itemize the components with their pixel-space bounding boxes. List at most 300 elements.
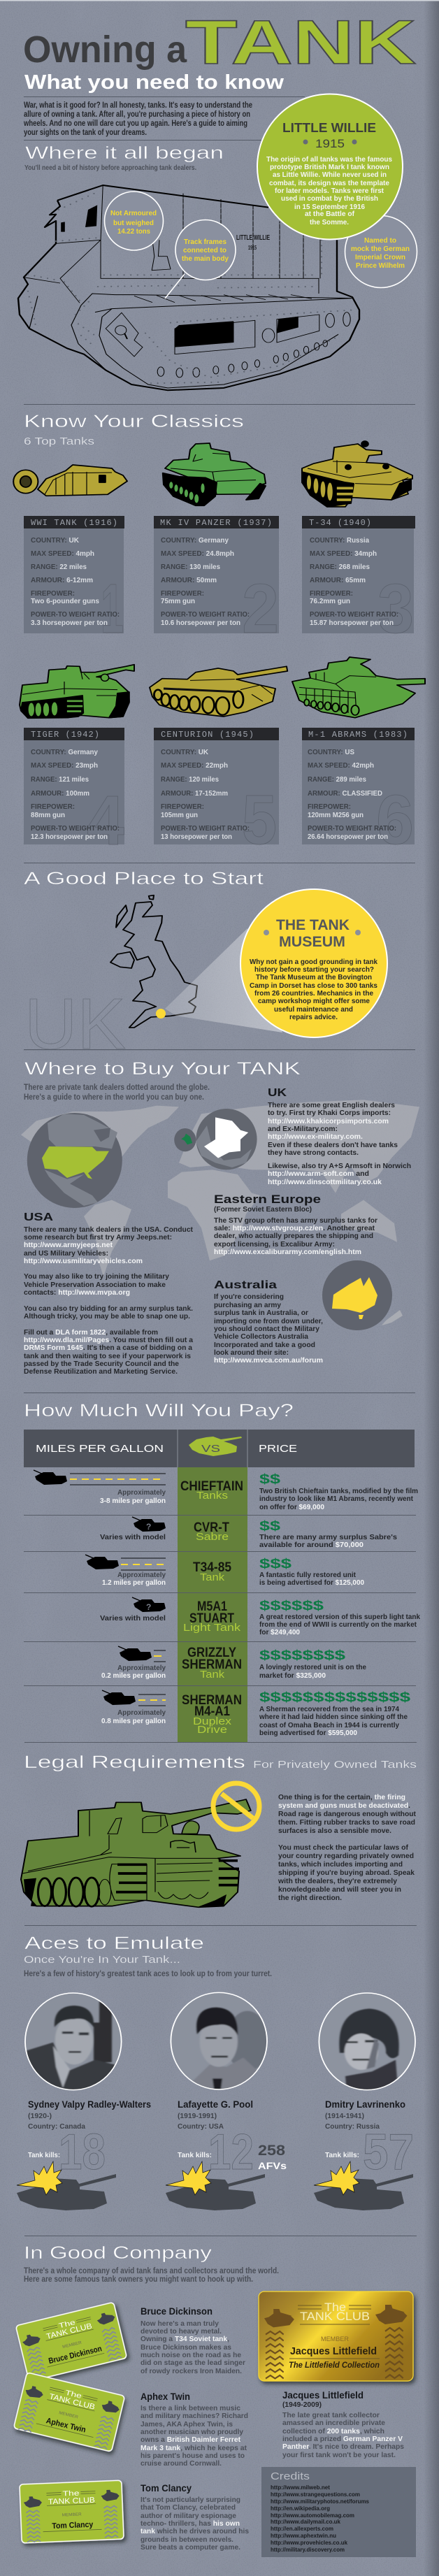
text block: legal: You must check the particular laws of — [278, 1843, 408, 1852]
text block: Bruce Dickinson: much noise on the road as he — [141, 2351, 241, 2359]
card: Aphex Twin — [13, 2373, 125, 2452]
row: M5A1 Stuart: $$$$$$ — [259, 1599, 324, 1613]
text block: UK dealers: http://www.ex-military.com. — [268, 1132, 363, 1141]
title: TANK — [185, 7, 416, 77]
row: CVR-T Sabre: ? — [146, 1522, 151, 1532]
panel: Tiger stats: 88mm gun — [31, 812, 65, 819]
faint UK lettering: UK — [24, 984, 126, 1064]
panel: Panzer stats: MK IV PANZER (1937) — [160, 518, 272, 528]
panel: Panzer stats: 10.6 horsepower per ton — [161, 619, 240, 627]
panel: Panzer stats: MAX SPEED: 24.8mph — [161, 550, 234, 558]
text block: Aphex Twin: James, AKA Aphex Twin, is — [141, 2420, 233, 2429]
card: Bruce Dickinson: TANK CLUB — [45, 2322, 93, 2341]
panel: Little Willie circle: as Little Willie. While never used in — [273, 171, 387, 179]
text block: USA dealers: You may also like to try joining the Military — [24, 1272, 169, 1281]
text block: Aphex Twin: Is there a link between music — [141, 2404, 240, 2412]
row: Sherman M4-A1: coast of Omaha Beach in 1944 is currently — [259, 1721, 399, 1729]
heading: legal requirements — [24, 1753, 417, 1772]
panel: WWI tank stats: FIREPOWER: — [31, 590, 75, 598]
panel: Centurion stats: ARMOUR: 17-152mm — [161, 790, 228, 798]
card: Jacques Littlefield gold: TANK CLUB — [300, 2310, 370, 2323]
panel: WWI tank stats: Two 6-pounder guns — [31, 598, 99, 605]
row: T34-85: Tank — [200, 1571, 225, 1583]
panel: T-34 stats — [302, 516, 415, 648]
row: CVR-T Sabre — [100, 1517, 397, 1549]
card: Aphex Twin: TANK CLUB — [48, 2392, 96, 2412]
card: Tom Clancy: The — [62, 2490, 80, 2498]
text block: USA dealers: http://www.usmilitaryvehicles.com — [24, 1257, 143, 1265]
text block: Jacques Littlefield: Jacques Littlefield — [282, 2389, 364, 2401]
panel: credits: http://www.milweb.net — [271, 2484, 330, 2491]
callout: named to mock: Named to — [364, 237, 396, 245]
illustration: Little Willie tank line art — [18, 185, 359, 390]
icon: large Tiger tank — [21, 1799, 251, 1907]
text block: UK dealers — [268, 1087, 411, 1186]
icon: Tiger tank — [20, 665, 134, 718]
panel: ace 2: (1919-1991) — [178, 2112, 217, 2120]
text block: Eastern Europe dealers: dealer, who actually prepares the shipping and — [214, 1232, 373, 1240]
text block: Jacques Littlefield: included a prized German Panzer V — [282, 2435, 403, 2443]
panel: tank museum circle: useful maintenance and — [274, 1005, 353, 1014]
text block: USA dealers — [24, 1211, 193, 1376]
panel: Panzer stats: 2 — [242, 570, 279, 648]
text block: Australia dealers: Australia — [214, 1279, 277, 1291]
text block: USA dealers: and US Military Vehicles: — [24, 1249, 108, 1258]
heading: legal requirements: Legal Requirements — [24, 1753, 245, 1772]
panel: T-34 stats: ARMOUR: 65mm — [310, 577, 366, 584]
text block: Jacques Littlefield: (1949-2009) — [282, 2401, 322, 2409]
heading: in good company — [24, 2243, 279, 2284]
panel: Abrams stats: ARMOUR: CLASSIFIED — [308, 790, 382, 798]
panel: ace 3 — [314, 2099, 414, 2210]
intro text — [23, 100, 252, 137]
text block: UK dealers: http://www.khakicorpsimports.com — [268, 1117, 389, 1125]
text block: Eastern Europe dealers — [214, 1193, 377, 1256]
heading: where it all began: You'll need a bit of history before approaching tank dealers. — [24, 164, 196, 172]
card: Tom Clancy: Tom Clancy — [52, 2521, 94, 2531]
panel: credits: http://en.wikipedia.org — [271, 2505, 330, 2512]
table header — [24, 1430, 415, 1467]
tank stencil label: LITTLE WILLIE — [236, 234, 270, 242]
table header: PRICE — [259, 1443, 297, 1455]
text block: Tom Clancy: It's not particularly surprising — [141, 2496, 240, 2504]
row: CVR-T Sabre: CVR-T — [194, 1520, 229, 1535]
text block: legal: them. Fitting rubber tracks to save road — [278, 1818, 415, 1827]
icon: Centurion tank — [150, 666, 287, 717]
panel: Abrams stats: FIREPOWER: — [308, 803, 351, 811]
panel: Abrams stats: COUNTRY: US — [308, 749, 354, 756]
row: CVR-T Sabre: available for around $70,000 — [259, 1541, 364, 1549]
heading: where to buy: Here's a guide to where in the world you can buy one. — [24, 1092, 204, 1102]
text block: Eastern Europe dealers: sale: http://www.stvgroup.cz/en. Another great — [214, 1224, 375, 1232]
card: Aphex Twin: MEMBER — [59, 2411, 79, 2420]
panel: ace 1 — [17, 2099, 151, 2210]
panel: credits: Credits — [271, 2470, 310, 2482]
row: Sherman M4-A1: being advertised for $595,000 — [259, 1729, 357, 1737]
text block: Aphex Twin: another musician who proudly — [141, 2428, 243, 2436]
panel: T-34 stats: 76.2mm gun — [310, 598, 350, 605]
text block: Jacques Littlefield: amassed an incredible private — [282, 2419, 385, 2427]
panel: Tiger stats: 4 — [87, 782, 124, 860]
row: Sherman M4-A1: A Sherman recovered from the sea in 1974 — [259, 1705, 399, 1713]
panel: Abrams stats: POWER-TO WEIGHT RATIO: — [308, 825, 396, 833]
text block: legal — [278, 1793, 416, 1902]
panel: Abrams stats: 6 — [376, 781, 414, 859]
row: T34-85: Approximately — [117, 1571, 166, 1579]
panel: WWI tank stats: POWER-TO WEIGHT RATIO: — [31, 611, 120, 619]
callout: not armoured: but weighed — [113, 220, 154, 227]
row: Sherman M4-A1: Drive — [197, 1724, 227, 1736]
map: UK outline — [110, 895, 197, 1028]
row: Sherman M4-A1: Approximately — [117, 1708, 166, 1717]
panel: ace 2: Country: USA — [178, 2122, 224, 2131]
text block: USA dealers: USA — [24, 1211, 54, 1223]
text block: legal: with the dealers, they're extremely — [278, 1877, 397, 1885]
icon: WWI tank — [13, 465, 127, 496]
text block: USA dealers: some research but first try Army Jeeps.net: — [24, 1233, 172, 1242]
text block: Jacques Littlefield — [282, 2389, 404, 2459]
panel: WWI tank stats: ARMOUR: 6-12mm — [31, 577, 93, 584]
callout: track frames: the main body — [182, 255, 229, 263]
text block: USA dealers: http://www.dla.mil/Pages. You must then fill out a — [24, 1336, 193, 1344]
panel: Abrams stats: 120mm M256 gun — [308, 812, 364, 819]
panel: Little Willie circle: at the Battle of — [305, 210, 354, 218]
panel: T-34 stats: MAX SPEED: 34mph — [310, 550, 377, 558]
panel: ace 2: AFVs — [258, 2160, 287, 2171]
text block: Tom Clancy: grounds in between novels. — [141, 2535, 233, 2544]
row: M5A1 Stuart: M5A1 — [197, 1599, 227, 1614]
text block: USA dealers: DRMS Form 1645. It's then a case of bidding on a — [24, 1344, 192, 1352]
chart: Britain globe — [174, 1128, 196, 1151]
panel: Little Willie circle: in 15 September 1916 — [294, 203, 365, 211]
row: Sherman M4-A1: 0.8 miles per gallon — [101, 1717, 166, 1725]
row: M5A1 Stuart: Light Tank — [183, 1622, 241, 1634]
panel: Panzer stats: ARMOUR: 50mm — [161, 577, 217, 584]
panel: tank museum circle: camp workshop might offer some — [258, 997, 370, 1005]
row: T34-85: T34-85 — [193, 1560, 231, 1575]
row: M5A1 Stuart: from the end of WWII is currently on the market — [259, 1620, 417, 1629]
panel: Tiger stats: ARMOUR: 100mm — [31, 790, 89, 798]
panel: T-34 stats: 3 — [377, 570, 414, 648]
card: Aphex Twin: The — [64, 2389, 83, 2401]
row: Chieftain: on offer for $69,000 — [259, 1503, 324, 1511]
marker: Dorset — [156, 1009, 166, 1019]
text block: legal: the right direction. — [278, 1894, 342, 1902]
panel: WWI tank stats: 3.3 horsepower per ton — [31, 619, 108, 627]
intro text: War, what is it good for? In all honesty, tanks. It's easy to understand the — [24, 100, 252, 110]
text block: Bruce Dickinson — [141, 2305, 245, 2375]
panel: Centurion stats: CENTURION (1945) — [161, 730, 254, 740]
card: Jacques Littlefield gold — [259, 2291, 413, 2381]
panel: Abrams stats: RANGE: 289 miles — [308, 776, 366, 784]
heading: how much will you pay: How Much Will You Pay? — [24, 1401, 294, 1420]
heading: know your classics: 6 Top Tanks — [24, 436, 94, 447]
text block: USA dealers: http://www.armyjeeps.net — [24, 1241, 113, 1249]
heading: know your classics: Know Your Classics — [24, 412, 244, 431]
text block: USA dealers: passed by the Trade Security Council and the — [24, 1360, 179, 1368]
title: Owning a — [23, 29, 187, 71]
intro text: wheels. And no one will dare cut you up again. Here's a guide to aiming — [23, 118, 247, 128]
callout: not armoured: Not Armoured — [110, 210, 157, 217]
card: Aphex Twin: Aphex Twin — [45, 2417, 87, 2435]
panel: Panzer stats — [154, 516, 279, 648]
text block: USA dealers: tank and then waiting to see if your paperwork is — [24, 1352, 191, 1360]
text block: Aphex Twin: Aphex Twin — [141, 2391, 190, 2402]
text block: Tom Clancy: techno- thrillers, has his own — [141, 2519, 240, 2528]
text block: UK dealers: to try. First try Khaki Corps imports: — [268, 1109, 391, 1117]
callout: track frames: Track frames — [184, 238, 226, 246]
card: Jacques Littlefield gold: Jacques Littlefield — [290, 2345, 377, 2357]
panel: ace 1: Country: Canada — [28, 2122, 85, 2131]
card: Bruce Dickinson: Bruce Dickinson — [48, 2345, 103, 2366]
panel: Panzer stats: FIREPOWER: — [161, 590, 204, 598]
heading: in good company: There's a whole company of avid tank fans and collectors around the world. — [24, 2266, 279, 2275]
intro text: your sights on the tank of your dreams. — [24, 127, 147, 137]
panel: Centurion stats: 13 horsepower per ton — [161, 833, 232, 841]
text block: Australia dealers: If you're considering — [214, 1293, 284, 1301]
card: Bruce Dickinson: The — [58, 2319, 77, 2330]
panel: tank museum circle: The Tank Museum at the Bovington — [256, 973, 372, 981]
text block: Jacques Littlefield: The late great tank collector — [282, 2411, 380, 2419]
panel: ace 3: Tank kills: — [325, 2151, 359, 2159]
row: Sherman M4-A1 — [101, 1690, 411, 1737]
callout: not armoured: 14.22 tons — [117, 228, 150, 236]
text block: Tom Clancy: author of military espionage — [141, 2512, 236, 2520]
title — [23, 7, 416, 94]
panel: credits: http://www.militaryphotos.net/forums — [271, 2498, 370, 2505]
text block: USA dealers: Defense Reutilization and Marketing Service. — [24, 1367, 178, 1376]
row: Grizzly Sherman: Approximately — [117, 1664, 166, 1672]
row: M5A1 Stuart: STUART — [189, 1611, 234, 1626]
row: M5A1 Stuart — [100, 1597, 420, 1636]
portrait: Radley-Walters — [25, 1992, 122, 2092]
panel: Little Willie circle: LITTLE WILLIE — [282, 121, 376, 135]
heading: legal requirements: For Privately Owned Tanks — [253, 1759, 417, 1771]
row: Sherman M4-A1: $$$$$$$$$$$$$$ — [259, 1690, 411, 1705]
panel: T-34 stats: COUNTRY: Russia — [310, 537, 369, 545]
row: Sherman M4-A1: SHERMAN — [182, 1693, 242, 1708]
panel: Centurion stats: 5 — [242, 781, 277, 859]
icon: T-34 tank — [302, 441, 412, 507]
row: M5A1 Stuart: ? — [146, 1602, 151, 1612]
text block: Tom Clancy: Sure beats a computer game. — [141, 2543, 240, 2552]
panel: tank museum circle: MUSEUM — [279, 934, 345, 950]
panel: Panzer stats: 75mm gun — [161, 598, 195, 605]
panel: tank museum circle — [240, 889, 387, 1037]
panel: Tiger stats: TIGER (1942) — [31, 730, 99, 740]
panel: credits — [261, 2467, 416, 2557]
tank stencil label — [236, 234, 270, 251]
row: Chieftain: $$ — [259, 1472, 281, 1487]
panel: Panzer stats: RANGE: 130 miles — [161, 563, 220, 571]
panel: credits: http://military.discovery.com — [271, 2547, 345, 2553]
heading: a good place to start: A Good Place to Start — [24, 869, 264, 888]
text block: Australia dealers: Incorporated and take a good — [214, 1341, 315, 1349]
text block: Bruce Dickinson: Bruce Dickinson — [141, 2305, 213, 2317]
text block: legal: shipping if you're buying abroad. Speak — [278, 1869, 415, 1877]
icon: Panzer tank — [163, 443, 266, 505]
panel: Centurion stats: MAX SPEED: 22mph — [161, 762, 228, 770]
text block: Eastern Europe dealers: The STV group often has army surplus tanks for — [214, 1216, 377, 1225]
text block: UK dealers: Likewise, also try A+S Armsoft in Norwich — [268, 1162, 411, 1170]
row: Chieftain: industry to look like M1 Abrams, recently went — [259, 1495, 413, 1503]
text block: Tom Clancy: that Tom Clancy, celebrated — [141, 2503, 236, 2512]
text block: Aphex Twin — [141, 2391, 248, 2468]
text block: Australia dealers: you should contact the Military — [214, 1325, 319, 1333]
panel: ace 3: 57 — [363, 2124, 414, 2180]
text block: Aphex Twin: cruise around Cornwall. — [141, 2459, 222, 2468]
panel: WWI tank stats — [24, 516, 124, 648]
text block: Eastern Europe dealers: export licensing, is Excalibur Army: — [214, 1240, 335, 1249]
row: Sherman M4-A1: Duplex — [193, 1715, 232, 1727]
text block: Aphex Twin: Mark 3 tank, which he keeps at — [141, 2444, 247, 2452]
text block: UK dealers: There are some great English dealers — [268, 1101, 395, 1109]
text block: Aphex Twin: owns a British Daimler Ferret — [141, 2435, 240, 2444]
panel: T-34 stats: RANGE: 268 miles — [310, 563, 370, 571]
text block: Australia dealers: Vehicle Collectors Australia — [214, 1332, 308, 1341]
callout: track frames — [165, 220, 236, 298]
panel: Abrams stats: 26.64 horsepower per ton — [308, 833, 388, 841]
panel: ace 2: Tank kills: — [178, 2151, 212, 2159]
text block: Tom Clancy — [141, 2482, 249, 2552]
text block: Bruce Dickinson: Now here's a man truly — [141, 2319, 219, 2328]
panel: ace 2: Lafayette G. Pool — [178, 2099, 253, 2110]
panel: Tiger stats: COUNTRY: Germany — [31, 749, 98, 756]
panel: Little Willie circle: 1915 — [315, 137, 345, 150]
text block: Eastern Europe dealers: (Former Soviet Eastern Bloc) — [214, 1205, 312, 1214]
panel: Little Willie circle: prototype British Mark I tank known — [270, 163, 389, 171]
row: T34-85: $$$ — [259, 1557, 292, 1571]
panel: Little Willie circle — [257, 94, 403, 239]
text block: UK dealers: http://www.dinscottmilitary.co.uk — [268, 1178, 382, 1186]
panel: ace 2 — [166, 2099, 287, 2210]
table header: MILES PER GALLON — [36, 1443, 164, 1455]
card: Bruce Dickinson — [15, 2302, 127, 2382]
text block: legal: One thing is for the certain, the firing — [278, 1793, 405, 1801]
heading: in good company: In Good Company — [24, 2243, 213, 2263]
panel: ace 1: Sydney Valpy Radley-Walters — [28, 2099, 151, 2110]
panel: credits: http://www.strangequestions.com — [271, 2491, 360, 2498]
row: Grizzly Sherman: GRIZZLY — [187, 1646, 236, 1660]
text block: Bruce Dickinson: of rowdy rockers Iron Maiden. — [141, 2367, 242, 2375]
callout: track frames: connected to — [183, 247, 226, 254]
row: T34-85 — [85, 1555, 364, 1587]
row: CVR-T Sabre: There are many army surplus Sabre's — [259, 1533, 397, 1541]
panel: Abrams stats: M-1 ABRAMS (1983) — [308, 730, 408, 740]
text block: Australia dealers: importing one from down under, — [214, 1317, 323, 1325]
row: CVR-T Sabre: Varies with model — [100, 1533, 166, 1541]
row: T34-85: is being advertised for $125,000 — [259, 1578, 364, 1587]
row: Grizzly Sherman: Tank — [200, 1669, 225, 1681]
row: T34-85: A fantastic fully restored unit — [259, 1571, 356, 1579]
panel: Tiger stats: POWER-TO WEIGHT RATIO: — [31, 825, 120, 833]
row: Chieftain: Tanks — [196, 1490, 228, 1502]
card: Tom Clancy: TANK CLUB — [48, 2496, 95, 2506]
chart: world map — [21, 1100, 419, 1277]
callout: named to mock — [345, 215, 417, 288]
row: Chieftain — [34, 1470, 418, 1511]
panel: Little Willie circle: the Somme. — [310, 218, 349, 226]
text block: Tom Clancy: Tom Clancy — [141, 2482, 192, 2494]
text block: Bruce Dickinson: did on stage as the lead singer — [141, 2359, 245, 2367]
tank stencil label: 1915 — [248, 245, 257, 251]
panel: Abrams stats: MAX SPEED: 42mph — [308, 762, 374, 770]
panel: Little Willie circle: for later models. Tanks were first — [275, 187, 384, 195]
panel: Tiger stats — [24, 728, 124, 860]
heading: where to buy: Where to Buy Your TANK — [24, 1059, 301, 1079]
text block: USA dealers: You can also try bidding for an army surplus tank. — [24, 1304, 193, 1313]
panel: Little Willie circle: used in combat by the British — [281, 194, 378, 203]
panel: T-34 stats: FIREPOWER: — [310, 590, 353, 598]
panel: Centurion stats — [154, 728, 279, 859]
text block: UK dealers: and Ex-Military.com: — [268, 1125, 338, 1133]
callout: named to mock: Prince Wilhelm — [356, 262, 405, 270]
heading: in good company: Here are some famous tank owners you might want to hook up with. — [24, 2274, 253, 2284]
card: Bruce Dickinson: MEMBER — [62, 2340, 82, 2350]
portrait: Pool — [171, 1992, 268, 2092]
text block: legal: knowledgeable and will steer you in — [278, 1885, 401, 1894]
row: CVR-T Sabre: Sabre — [196, 1531, 229, 1543]
heading: aces to emulate: Aces to Emulate — [24, 1934, 204, 1953]
text block: Eastern Europe dealers: Eastern Europe — [214, 1193, 321, 1206]
portrait: Lavrinenko — [319, 1992, 415, 2092]
heading: where to buy — [24, 1059, 301, 1102]
panel: tank museum circle: Camp in Dorset has close to 300 tanks — [250, 981, 377, 990]
row: Grizzly Sherman: SHERMAN — [182, 1657, 242, 1672]
text block: USA dealers: Vehicle Preservation Association to make — [24, 1281, 166, 1289]
panel: tank museum circle: Why not gain a good grounding in tank — [250, 958, 377, 966]
panel: Panzer stats: COUNTRY: Germany — [161, 537, 229, 545]
callout: not armoured — [105, 192, 164, 250]
text block: Tom Clancy: tank which he drives around his — [141, 2527, 249, 2535]
text block: USA dealers: Although tricky, you may be able to snap one up. — [24, 1312, 190, 1321]
row: Chieftain: Two British Chieftain tanks, modified by the film — [259, 1487, 418, 1495]
heading: where it all began: Where it all began — [25, 143, 224, 163]
row: Grizzly Sherman: A lovingly restored unit is on the — [259, 1663, 366, 1671]
panel: Centurion stats: COUNTRY: UK — [161, 749, 209, 756]
text block: Australia dealers — [214, 1279, 323, 1365]
panel: Centurion stats: 105mm gun — [161, 812, 198, 819]
chart: Eastern Europe globe — [196, 1109, 257, 1170]
row: Grizzly Sherman: market for $325,000 — [259, 1671, 326, 1680]
panel: ace 1: Tank kills: — [28, 2151, 60, 2159]
text block: Aphex Twin: and military machines? Richard — [141, 2412, 248, 2420]
text block: legal: system and guns must be deactivated. — [278, 1801, 410, 1810]
spotlight beam — [165, 928, 282, 1032]
text block: UK dealers: they have strong contacts. — [268, 1149, 359, 1157]
card: Jacques Littlefield gold: The — [324, 2301, 346, 2314]
text block: Jacques Littlefield: collection of 200 tanks, which — [282, 2427, 384, 2435]
row: T34-85: 1.2 miles per gallon — [102, 1578, 166, 1587]
heading: know your classics — [24, 412, 244, 447]
text block: UK dealers: http://www.arm-soft.com and — [268, 1170, 369, 1178]
row: Sherman M4-A1: where it had laid hidden since sinking off the — [259, 1713, 408, 1721]
panel: credits: http://en.allexperts.com — [271, 2526, 333, 2532]
panel: T-34 stats: POWER-TO WEIGHT RATIO: — [310, 611, 398, 619]
heading: where it all began — [24, 143, 224, 172]
panel: credits: http://www.aphextwin.nu — [271, 2533, 336, 2539]
panel: credits: http://www.provehicles.co.uk — [271, 2540, 348, 2546]
text block: Bruce Dickinson: Bruce Dickinson makes as — [141, 2343, 231, 2352]
panel: tank museum circle: THE TANK — [276, 917, 350, 933]
heading: where to buy: There are private tank dealers dotted around the globe. — [24, 1082, 210, 1092]
row: Grizzly Sherman: 0.2 miles per gallon — [101, 1671, 166, 1680]
panel: T-34 stats: 15.87 horsepower per ton — [310, 619, 394, 627]
text block: legal: Road rage is dangerous enough without — [278, 1810, 416, 1818]
callout: named to mock: Imperial Crown — [355, 254, 405, 261]
panel: ace 3: Country: Russia — [325, 2122, 380, 2131]
row: M5A1 Stuart: A great restored version of this superb light tank — [259, 1613, 420, 1621]
